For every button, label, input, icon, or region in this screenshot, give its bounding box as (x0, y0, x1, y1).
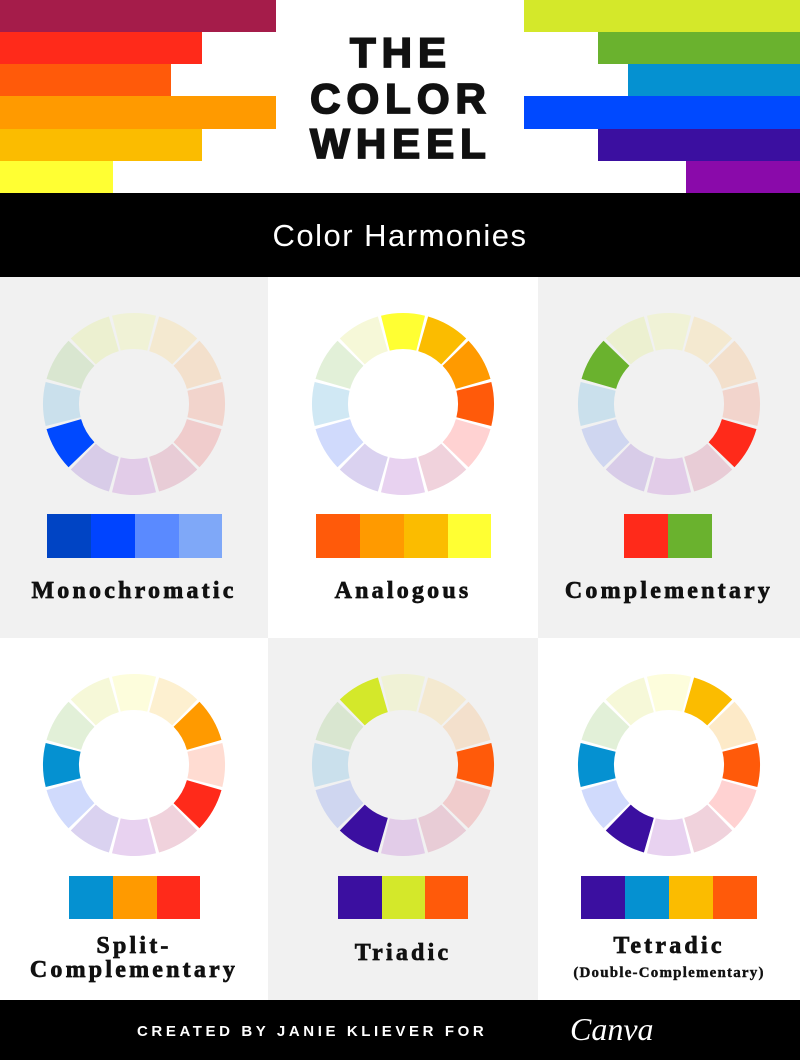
wheel: complementary (578, 313, 760, 495)
subtitle band (0, 193, 800, 277)
swatches: analogous (316, 514, 491, 558)
header left bars (0, 0, 276, 193)
wheel: analogous (312, 313, 494, 495)
title (310, 29, 492, 167)
label: triadic: Triadic (355, 940, 451, 966)
panel backgrounds (0, 277, 800, 1000)
header right bars (524, 0, 800, 193)
title: THE (350, 29, 452, 76)
title: COLOR (310, 75, 492, 122)
label: monochromatic: Monochromatic (31, 578, 237, 604)
label: tetradic: Tetradic (613, 933, 725, 959)
panel: tetradic (573, 674, 765, 981)
wheel: tetradic (578, 674, 760, 856)
swatches: split-complementary (69, 876, 200, 919)
label: split-complementary: Complementary (30, 957, 238, 983)
label: complementary: Complementary (565, 578, 773, 604)
panel: triadic (312, 674, 494, 966)
footer (0, 1000, 800, 1060)
swatches: triadic (338, 876, 468, 919)
wheel: triadic (312, 674, 494, 856)
label: split-complementary (30, 933, 238, 983)
swatches: complementary (624, 514, 712, 558)
label: split-complementary: Split- (96, 933, 172, 959)
wheel: monochromatic (43, 313, 225, 495)
panel: complementary (565, 313, 773, 604)
label: analogous: Analogous (335, 578, 471, 604)
subtitle band: Color Harmonies (272, 218, 528, 253)
panel: monochromatic (31, 313, 237, 604)
swatches: tetradic (581, 876, 757, 919)
label: tetradic: (Double-Complementary) (573, 965, 765, 981)
wheel: split-complementary (43, 674, 225, 856)
panel: analogous (312, 313, 494, 604)
footer: Canva (570, 1011, 654, 1047)
title: WHEEL (310, 120, 492, 167)
panel: split-complementary (30, 674, 238, 983)
label: tetradic (573, 933, 765, 981)
swatches: monochromatic (47, 514, 222, 558)
footer: CREATED BY JANIE KLIEVER FOR (137, 1023, 487, 1040)
